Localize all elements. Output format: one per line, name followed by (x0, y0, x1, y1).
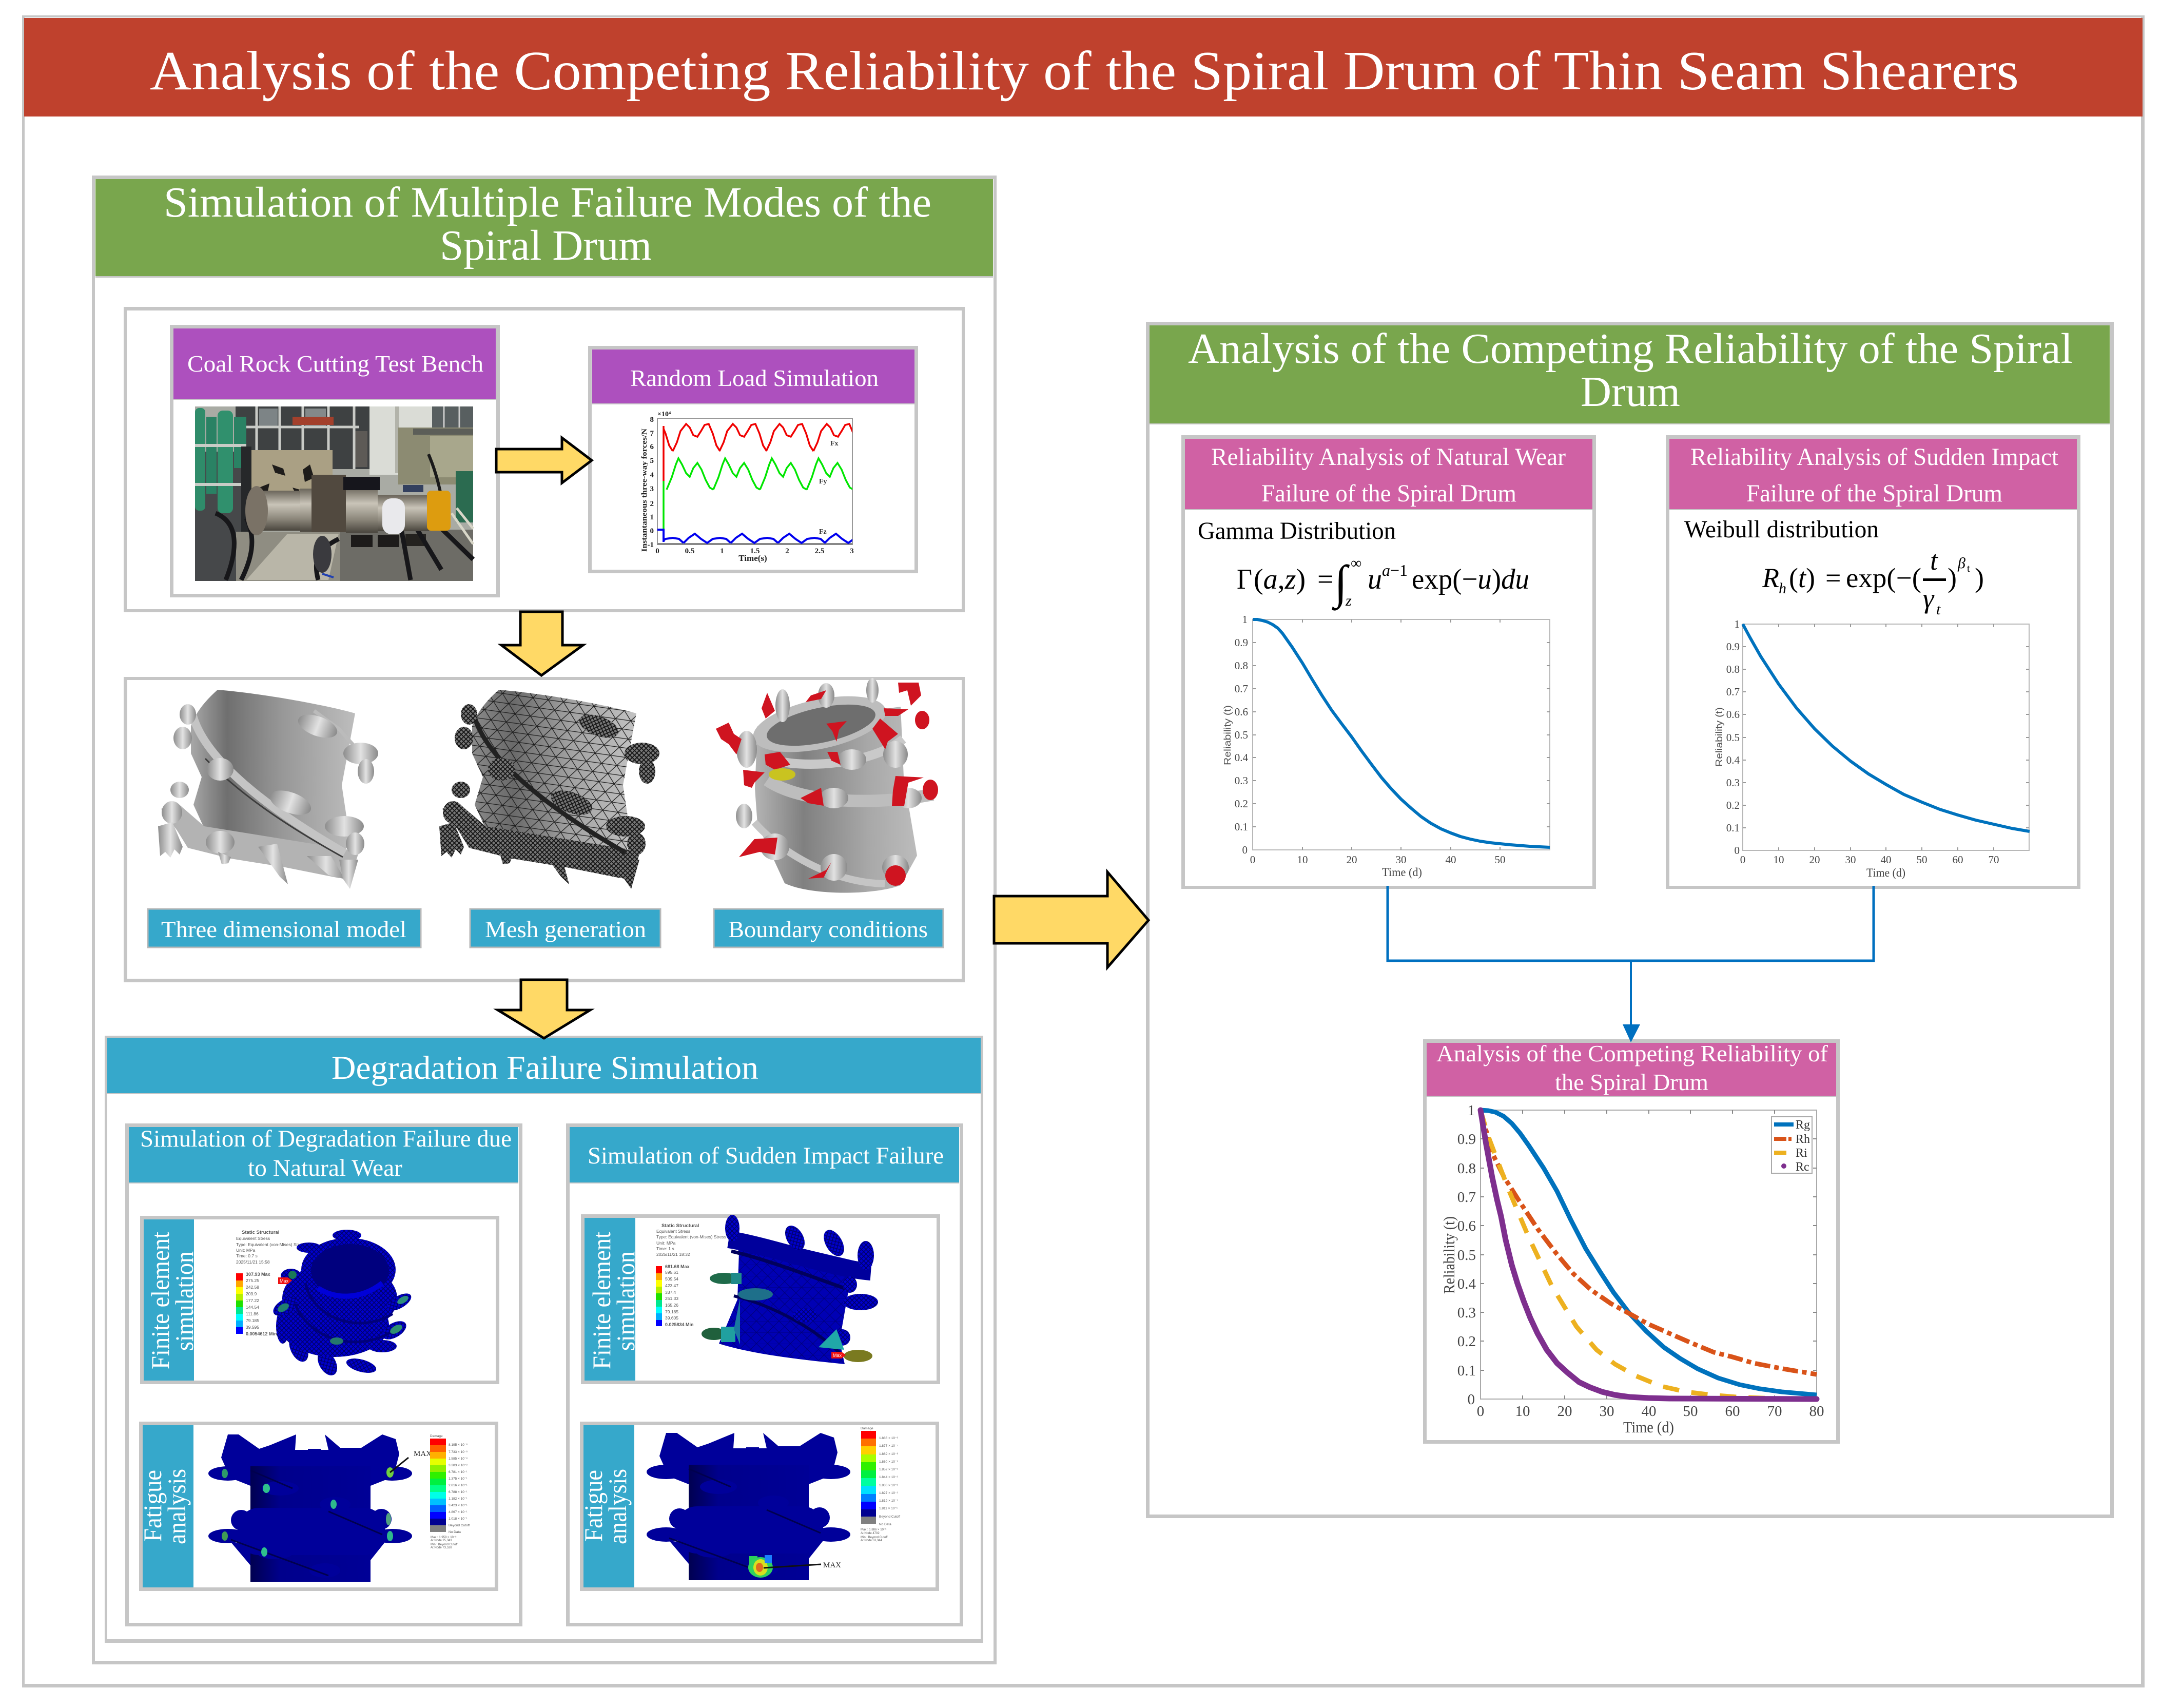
fatigue legend: At Node 53,344 (861, 1539, 882, 1542)
line chart: competing reliability curves: 0.7 (1457, 1189, 1476, 1206)
line chart: competing reliability curves: 20 (1557, 1403, 1572, 1420)
panel: competing reliability analysis (1146, 322, 2114, 1518)
line chart: gamma reliability: 0.8 (1235, 659, 1248, 672)
line chart: weibull reliability (1714, 618, 2030, 879)
panel: natural wear reliability (1181, 435, 1596, 889)
line chart: weibull reliability: 30 (1845, 853, 1856, 866)
formula: weibull reliability (1762, 545, 1984, 618)
FEA legend and notes: 39.605 (665, 1315, 678, 1321)
formula: gamma function: = (1317, 564, 1334, 595)
line chart: instantaneous three-way forces: -1 (648, 541, 654, 549)
panel: modelling steps (124, 677, 965, 982)
line chart: instantaneous three-way forces: 0 (655, 547, 659, 555)
legend (1771, 1117, 1812, 1174)
panel: fatigue analysis, sudden impact (579, 1422, 939, 1591)
heading: competing reliability analysis (1150, 325, 2110, 424)
line chart: instantaneous three-way forces: Instantaneous three-way forces/N (640, 429, 649, 552)
FEA legend and notes: Static Structural (242, 1230, 279, 1235)
line chart: competing reliability curves: Time (d) (1623, 1418, 1674, 1436)
heading: natural wear reliability: Reliability Analysis of Natural Wear (1211, 443, 1566, 471)
panel: finite element simulation, natural wear (140, 1216, 499, 1384)
FEA model: stress on drum, natural wear (270, 1230, 414, 1379)
arrow: simulation to reliability analysis (994, 872, 1148, 967)
heading: natural wear reliability: Failure of the Spiral Drum (1261, 480, 1516, 507)
panel: simulation of multiple failure modes (92, 176, 997, 1664)
label: mesh generation: Mesh generation (485, 916, 646, 942)
line chart: instantaneous three-way forces: 0.5 (685, 547, 694, 555)
heading: natural wear degradation: Simulation of Degradation Failure due (140, 1125, 512, 1152)
FEA legend and notes: Type: Equivalent (von-Mises) Stress (236, 1242, 306, 1247)
line chart: gamma reliability: 0.5 (1235, 729, 1248, 741)
FEA legend and notes: 79.185 (665, 1309, 678, 1314)
heading: sudden impact reliability: Failure of the Spiral Drum (1746, 480, 2002, 507)
formula: weibull reliability: = (1825, 562, 1841, 593)
fatigue legend: 6.781 × 10⁻¹ (449, 1470, 468, 1474)
line chart: gamma reliability: 0.9 (1235, 636, 1248, 649)
FEA legend and notes: 111.86 (246, 1311, 259, 1316)
formula: weibull reliability: exp(−( (1846, 562, 1921, 593)
heading: random load simulation: Random Load Simulation (630, 365, 879, 391)
line chart: gamma reliability: 0.7 (1235, 683, 1248, 695)
FEA legend and notes: 144.54 (246, 1305, 259, 1310)
heading: simulation of multiple failure modes: Simulation of Multiple Failure Modes of the (164, 179, 931, 226)
heading: competing reliability result: Analysis of the Competing Reliability of (1436, 1040, 1828, 1066)
formula: gamma function: Γ (1237, 564, 1252, 595)
legend: Rg (1796, 1118, 1810, 1132)
panel: competing reliability result (1423, 1039, 1840, 1444)
FEA legend and notes: 337.4 (665, 1290, 676, 1295)
label: fatigue analysis: Fatigue (138, 1470, 167, 1542)
fatigue MAX callout (764, 1561, 841, 1569)
FEA legend and notes: Unit: MPa (656, 1240, 676, 1246)
arrow head: connector into competing result (1623, 1024, 1640, 1042)
text: weibull distribution: Weibull distribution (1684, 516, 1879, 543)
FEA legend and notes: 251.33 (665, 1296, 678, 1301)
line chart: weibull reliability: 0 (1740, 853, 1745, 866)
arrow: test bench to load simulation (496, 438, 592, 483)
FEA legend and notes: Unit: MPa (236, 1248, 256, 1253)
heading: competing reliability result: the Spiral Drum (1555, 1069, 1708, 1095)
line chart: gamma reliability: 10 (1297, 853, 1308, 866)
fatigue legend: 8.195 × 10⁻⁸ (449, 1443, 468, 1447)
line chart: weibull reliability: 0.8 (1726, 663, 1740, 675)
fatigue legend: 3.283 × 10⁻⁹ (449, 1464, 468, 1467)
label: three dimensional model: Three dimensional model (161, 916, 406, 942)
panel: fatigue analysis, natural wear (138, 1422, 498, 1591)
formula: weibull reliability: ) (1948, 562, 1957, 593)
fatigue legend: 1.018 × 10⁻¹ (449, 1517, 468, 1521)
line chart: weibull reliability: 20 (1809, 853, 1820, 866)
FEA model: stress on drum, sudden impact (702, 1215, 878, 1364)
fatigue MAX callout: MAX (414, 1450, 432, 1458)
FEA legend and notes: Equivalent Stress (236, 1236, 270, 1241)
fatigue legend: No Data (449, 1530, 461, 1534)
heading: degradation failure simulation (107, 1038, 981, 1094)
FEA legend and notes: 595.61 (665, 1270, 678, 1275)
fatigue legend: Max : 1.958 × 10⁻⁸ (431, 1536, 457, 1539)
formula: weibull reliability: h (1779, 580, 1786, 597)
fatigue legend: 6.788 × 10⁻¹ (449, 1490, 468, 1494)
line chart: competing reliability curves: 0.3 (1457, 1305, 1476, 1321)
formula: gamma function: u (1368, 564, 1382, 595)
line chart: competing reliability curves: 0.1 (1457, 1363, 1476, 1379)
line chart: weibull reliability: 0.6 (1726, 708, 1740, 721)
fatigue legend: 1.860 × 10⁻⁹ (879, 1460, 898, 1464)
curve: Rh (1481, 1110, 1817, 1374)
FEA legend and notes: 242.58 (246, 1285, 259, 1290)
line chart: weibull reliability: 0.7 (1726, 686, 1740, 698)
label: three dimensional model (148, 909, 421, 947)
heading: sudden impact failure: Simulation of Sudden Impact Failure (588, 1142, 944, 1169)
formula: weibull reliability: (t) (1789, 562, 1815, 593)
fatigue legend: At Node 73,538 (431, 1546, 452, 1549)
label: fatigue analysis: analysis (603, 1469, 632, 1544)
formula: weibull reliability: t (1936, 601, 1941, 618)
fatigue legend: 1.827 × 10⁻¹ (879, 1491, 898, 1495)
label: finite element simulation: simulation (611, 1251, 640, 1351)
formula: weibull reliability: β (1957, 555, 1965, 572)
heading: sudden impact reliability: Reliability Analysis of Sudden Impact (1690, 443, 2059, 471)
line chart: competing reliability curves: 60 (1725, 1403, 1740, 1420)
line chart: gamma reliability: 20 (1347, 853, 1357, 866)
heading: natural wear degradation: to Natural Wear (248, 1155, 402, 1181)
line chart: instantaneous three-way forces: 3 (850, 547, 854, 555)
fatigue legend: 4.867 × 10⁻¹ (449, 1510, 468, 1514)
formula: gamma function: a−1 (1382, 561, 1408, 579)
FEA legend and notes: Static Structural (661, 1223, 699, 1229)
fatigue legend: Damage (430, 1434, 443, 1438)
line chart: gamma reliability: Reliability (t) (1222, 705, 1233, 765)
label: finite element simulation: Finite element (146, 1232, 174, 1369)
fatigue legend (861, 1427, 900, 1542)
label: fatigue analysis (579, 1425, 634, 1587)
heading: sudden impact reliability (1669, 439, 2077, 510)
FEA legend and notes (656, 1223, 726, 1327)
label: boundary conditions: Boundary conditions (728, 916, 928, 942)
panel: random load simulation (588, 346, 918, 573)
formula: gamma function: z (1345, 592, 1352, 609)
label: fatigue analysis: Fatigue (579, 1470, 608, 1542)
line chart: gamma reliability: 0.1 (1235, 821, 1248, 833)
line chart: gamma reliability: 0.4 (1235, 751, 1248, 764)
line chart: competing reliability curves: 0.8 (1457, 1160, 1476, 1177)
legend: Rh (1796, 1133, 1810, 1146)
line chart: gamma reliability: 0 (1242, 844, 1248, 856)
line chart: instantaneous three-way forces: 0 (650, 527, 654, 535)
image: mesh generation (439, 690, 659, 889)
line chart: weibull reliability: 0.3 (1726, 777, 1740, 789)
line chart: instantaneous three-way forces: 3 (650, 485, 654, 493)
panel: degradation failure simulation (105, 1036, 983, 1643)
line chart: gamma reliability: 30 (1396, 853, 1406, 866)
line chart: gamma reliability: 0 (1250, 853, 1255, 866)
formula: weibull reliability: t (1967, 563, 1970, 574)
line chart: weibull reliability: 50 (1916, 853, 1928, 866)
line chart: weibull reliability: 0.9 (1726, 640, 1740, 653)
fatigue legend: No Data (879, 1523, 891, 1526)
photo: test bench (195, 406, 473, 581)
FEA legend and notes: Type: Equivalent (von-Mises) Stress (656, 1234, 726, 1239)
curve: Ri (1481, 1110, 1817, 1399)
formula: gamma function: ∫ (1332, 556, 1350, 611)
fatigue legend: At Node 25,343 (431, 1539, 452, 1542)
FEA model: stress on drum, sudden impact: Max (833, 1353, 842, 1358)
line chart: weibull reliability: 10 (1774, 853, 1784, 866)
arrow: bench to modelling (501, 612, 583, 675)
line chart: instantaneous three-way forces: 5 (650, 457, 654, 465)
heading: competing reliability result (1427, 1040, 1836, 1097)
panel: sudden impact (566, 1123, 963, 1626)
line chart: weibull reliability: 0.4 (1726, 754, 1740, 766)
fatigue legend: 1.375 × 10⁻¹ (449, 1477, 468, 1481)
line chart: competing reliability curves: 0 (1468, 1391, 1475, 1408)
fatigue legend: 1.811 × 10⁻¹ (879, 1507, 898, 1510)
line chart: weibull reliability: Time (d) (1866, 866, 1905, 879)
label: finite element simulation: Finite element (587, 1232, 616, 1369)
line chart: competing reliability curves: 30 (1599, 1403, 1614, 1420)
label: finite element simulation: simulation (170, 1251, 199, 1351)
FEA legend and notes: Equivalent Stress (656, 1229, 690, 1234)
legend: Ri (1796, 1147, 1807, 1160)
formula: weibull reliability: ) (1975, 562, 1984, 593)
FEA legend and notes: 79.185 (246, 1318, 259, 1323)
line chart: competing reliability curves: 50 (1683, 1403, 1698, 1420)
fatigue legend: 1.819 × 10⁻¹ (879, 1499, 898, 1503)
line chart: weibull reliability: Reliability (t) (1714, 707, 1724, 767)
line chart: weibull reliability: 0 (1735, 844, 1740, 857)
fatigue legend: Min : Beyond Cutoff (431, 1543, 458, 1546)
line chart: instantaneous three-way forces: Fy (819, 478, 827, 486)
image: boundary conditions (716, 678, 938, 893)
line chart: instantaneous three-way forces: 2 (650, 500, 654, 508)
line chart: competing reliability curves: 0.4 (1457, 1276, 1476, 1292)
line chart: instantaneous three-way forces: 2.5 (815, 547, 824, 555)
label: boundary conditions (714, 909, 943, 947)
line chart: weibull reliability: 60 (1952, 853, 1963, 866)
FEA legend and notes: 423.47 (665, 1283, 678, 1288)
panel: sudden impact reliability (1666, 435, 2080, 889)
fatigue legend: Min : Beyond Cutoff (861, 1536, 888, 1539)
heading: natural wear reliability (1185, 439, 1592, 510)
FEA legend and notes: 307.93 Max (246, 1272, 270, 1277)
FEA legend and notes: 2025/11/21 18:32 (656, 1252, 690, 1257)
line chart: competing reliability curves: 80 (1809, 1403, 1824, 1420)
line chart: competing reliability curves: 0.2 (1457, 1333, 1476, 1350)
line chart: competing reliability curves: 0 (1477, 1403, 1484, 1420)
formula: weibull reliability: γ (1923, 583, 1935, 614)
legend: Rc (1796, 1160, 1809, 1174)
fatigue legend: 1.182 × 10⁻¹ (449, 1497, 468, 1501)
heading: simulation of multiple failure modes: Spiral Drum (440, 222, 652, 269)
label: finite element simulation (144, 1219, 199, 1381)
formula: gamma function (1237, 555, 1529, 611)
FEA legend and notes: 275.25 (246, 1278, 259, 1283)
label: fatigue analysis (138, 1425, 193, 1587)
line chart: competing reliability curves (1440, 1102, 1824, 1436)
line chart: competing reliability curves: 10 (1515, 1403, 1530, 1420)
panel: test bench and load simulation (124, 307, 965, 612)
fatigue legend: Damage (861, 1427, 873, 1430)
panel: coal rock cutting test bench (170, 325, 500, 597)
label: fatigue analysis: analysis (162, 1469, 191, 1544)
fatigue legend: Beyond Cutoff (449, 1524, 470, 1527)
fatigue legend: Beyond Cutoff (879, 1515, 900, 1519)
heading: degradation failure simulation: Degradation Failure Simulation (332, 1050, 758, 1086)
line chart: competing reliability curves: 0.5 (1457, 1247, 1476, 1264)
panel: natural wear (125, 1123, 522, 1626)
title banner (24, 18, 2143, 117)
fatigue legend: 7.733 × 10⁻⁸ (449, 1450, 468, 1454)
heading: competing reliability analysis: Analysis of the Competing Reliability of the Spiral (1188, 325, 2073, 373)
heading: natural wear degradation (129, 1125, 518, 1183)
line chart: competing reliability curves: 70 (1767, 1403, 1782, 1420)
fatigue legend: 2.816 × 10⁻¹ (449, 1484, 468, 1487)
fatigue legend: 1.836 × 10⁻¹ (879, 1484, 898, 1487)
fatigue model: damage on drum, natural wear (208, 1434, 412, 1582)
FEA legend and notes (236, 1230, 306, 1336)
curve: Rg (1481, 1110, 1817, 1395)
line chart: competing reliability curves: Reliability (t) (1440, 1216, 1458, 1294)
fatigue legend: 1.877 × 10⁻⁷ (879, 1444, 898, 1448)
line chart: instantaneous three-way forces: ×10⁴ (657, 411, 671, 418)
FEA model: stress on drum, natural wear: Max (280, 1278, 289, 1284)
arrow: modelling to degradation (498, 980, 590, 1038)
image: three dimensional drum model (158, 690, 378, 889)
formula: weibull reliability: R (1762, 562, 1779, 593)
line chart: weibull reliability: 0.5 (1726, 731, 1740, 744)
line chart: gamma reliability (1222, 613, 1550, 879)
FEA legend and notes: 209.9 (246, 1291, 257, 1296)
fatigue model: damage on drum, sudden impact (647, 1433, 850, 1580)
line chart: gamma reliability: Time (d) (1382, 866, 1422, 879)
line chart: weibull reliability: 1 (1735, 618, 1740, 630)
fatigue legend: 1.886 × 10⁻⁶ (879, 1437, 898, 1440)
line chart: competing reliability curves: 0.9 (1457, 1131, 1476, 1148)
FEA legend and notes: 2025/11/21 15:58 (236, 1259, 270, 1265)
line chart: weibull reliability: 40 (1880, 853, 1892, 866)
line chart: weibull reliability: 0.1 (1726, 822, 1740, 834)
line chart: instantaneous three-way forces: Fz (819, 528, 827, 536)
fatigue legend (430, 1434, 470, 1549)
line chart: instantaneous three-way forces: Fx (830, 440, 839, 448)
fatigue legend: Max : 1.886 × 10⁻⁶ (861, 1528, 887, 1531)
curve: Rc (1481, 1110, 1817, 1399)
line chart: gamma reliability: 40 (1445, 853, 1456, 866)
line chart: instantaneous three-way forces: 2 (785, 547, 789, 555)
line chart: instantaneous three-way forces: 8 (650, 416, 654, 424)
FEA legend and notes: Time: 0.7 s (236, 1253, 258, 1258)
label: finite element simulation (585, 1218, 640, 1381)
line chart: instantaneous three-way forces: 1 (720, 547, 724, 555)
line chart: instantaneous three-way forces: 1.5 (750, 547, 760, 555)
heading: sudden impact failure (570, 1127, 959, 1183)
heading: competing reliability analysis: Drum (1581, 368, 1680, 416)
fatigue legend: 1.844 × 10⁻¹ (879, 1476, 898, 1479)
fatigue legend: 3.423 × 10⁻¹ (449, 1504, 468, 1507)
FEA legend and notes: 165.26 (665, 1303, 678, 1308)
fatigue legend: 1.869 × 10⁻⁸ (879, 1452, 898, 1456)
heading: coal rock cutting test bench: Coal Rock Cutting Test Bench (187, 351, 483, 377)
FEA legend and notes: Time: 1 s (656, 1246, 674, 1251)
FEA legend and notes: 681.68 Max (665, 1264, 690, 1269)
fatigue MAX callout: MAX (823, 1561, 841, 1569)
fatigue legend: 1.585 × 10⁻⁸ (449, 1457, 468, 1461)
formula: gamma function: exp(−u)du (1412, 564, 1529, 595)
connector: reliability panels to competing analysis (1388, 886, 1874, 1025)
line chart: instantaneous three-way forces: Time(s) (738, 553, 767, 563)
panel: finite element simulation, sudden impact (581, 1214, 940, 1384)
line chart: weibull reliability: 0.2 (1726, 799, 1740, 811)
fatigue MAX callout (390, 1450, 432, 1472)
label: mesh generation (470, 909, 660, 947)
line chart: gamma reliability: 1 (1242, 613, 1248, 626)
text: gamma distribution: Gamma Distribution (1198, 517, 1396, 545)
heading: simulation of multiple failure modes (95, 179, 993, 278)
line chart: instantaneous three-way forces (641, 412, 854, 563)
line chart: gamma reliability: 0.6 (1235, 706, 1248, 718)
line chart: gamma reliability: 0.3 (1235, 774, 1248, 787)
line chart: weibull reliability: 70 (1988, 853, 1999, 866)
heading: random load simulation (592, 350, 914, 404)
title banner: Analysis of the Competing Reliability of the Spiral Drum of Thin Seam Shearers (150, 41, 2019, 102)
line chart: instantaneous three-way forces: 7 (650, 430, 654, 438)
line chart: competing reliability curves: 0.6 (1457, 1218, 1476, 1234)
line chart: competing reliability curves: 1 (1468, 1102, 1475, 1119)
FEA legend and notes: 0.025834 Min (665, 1322, 694, 1327)
line chart: instantaneous three-way forces: 4 (650, 471, 654, 479)
line chart: instantaneous three-way forces: 6 (650, 443, 654, 451)
FEA legend and notes: 177.22 (246, 1298, 259, 1303)
formula: gamma function: (a,z) (1254, 564, 1306, 595)
line chart: competing reliability curves: 40 (1641, 1403, 1657, 1420)
line chart: gamma reliability: 0.2 (1235, 798, 1248, 810)
FEA legend and notes: 0.0054612 Min (246, 1331, 277, 1336)
FEA legend and notes: 39.595 (246, 1325, 259, 1330)
line chart: gamma reliability: 50 (1494, 853, 1506, 866)
formula: gamma function: ∞ (1351, 555, 1361, 572)
heading: coal rock cutting test bench (173, 328, 496, 400)
formula: weibull reliability: t (1930, 545, 1939, 576)
line chart: instantaneous three-way forces: 1 (650, 513, 654, 521)
FEA legend and notes: 509.54 (665, 1276, 678, 1282)
fatigue legend: At Node 4702 (861, 1532, 880, 1535)
fatigue legend: 1.852 × 10⁻¹ (879, 1468, 898, 1471)
